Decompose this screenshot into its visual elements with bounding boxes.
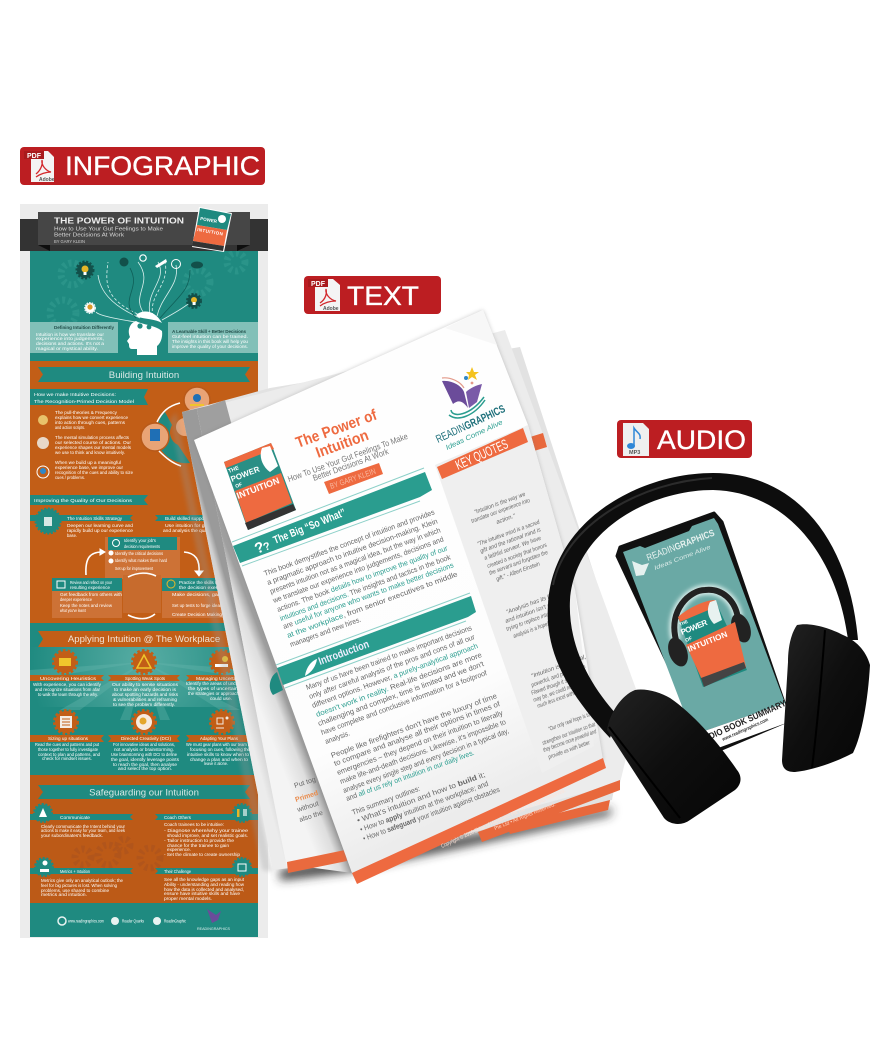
- poster header: Better Decisions At Work: [54, 232, 124, 238]
- text blocks: should improve, and set realistic goals.: [167, 833, 248, 838]
- illustration: headphones: [548, 473, 870, 824]
- text: introduction paragraphs: and all of us rely on intuition in our daily lives.: [345, 748, 475, 803]
- footer band: Copyright © 2016 Shine of Happiness Pte Ltd • All Rights Reserved.: [440, 787, 567, 850]
- text row 1: [33, 676, 253, 707]
- block: tips: The Intuition Skills Strategy: [67, 516, 123, 521]
- panel: acquirable skill: [168, 322, 258, 353]
- text row 1: to make an early decision is: [114, 687, 177, 692]
- text: model steps: our selected course of actions. Our: [55, 440, 131, 445]
- banner: safeguarding: Safeguarding our Intuition: [89, 788, 199, 798]
- quotes: strengthen our intuition so that: [542, 722, 597, 747]
- quotes: created a society that honors: [487, 543, 548, 570]
- box: reflect: Keep the notes and review: [60, 603, 113, 608]
- text blocks: your subordinates's feedback.: [41, 833, 103, 838]
- text: summary paragraph: at the workplace , from senior executives to middle: [286, 570, 459, 640]
- badges row 2: [55, 711, 233, 733]
- mini book cover: POWER: [679, 618, 709, 637]
- quotes: "Our only real hope is to: [548, 712, 591, 733]
- text: introduction paragraphs: analysis.: [324, 729, 351, 746]
- quotes: powerful, and practical too.: [530, 663, 587, 689]
- panel: stacked document: [170, 310, 640, 884]
- panel: defining intuition: magical or mystical ability.: [36, 346, 98, 351]
- back page 2: [197, 330, 640, 873]
- sidebar: key quotes: [435, 425, 598, 773]
- box: practice: Set up tests to forge ideas: [172, 603, 223, 608]
- footer band: [352, 758, 606, 884]
- text blocks: how the data is collected and analysed,: [164, 887, 244, 892]
- quotes: gift." - Albert Einstein: [496, 561, 541, 583]
- column banners: [30, 814, 258, 874]
- page text fragment: also the: [298, 810, 324, 824]
- text blocks: Clearly communicate the Intent behind your: [41, 824, 125, 829]
- text: introduction paragraphs: doesn't work in reality. Real-life decisions are more: [315, 650, 483, 719]
- box: practice: Practice the skills with: [179, 580, 223, 585]
- quotes: Flawed though it sometimes: [531, 671, 587, 697]
- text row 2: context to plan and patterns, and: [38, 752, 100, 757]
- text blocks: Coach trainees to be intuitive:: [164, 822, 224, 827]
- text row 1: the strategies or approaches you: [188, 691, 252, 696]
- box: decision requirements: decision requirements: [124, 544, 161, 549]
- label: audio: AUDIO: [657, 425, 746, 455]
- block: tips: [30, 509, 230, 538]
- box: reflect: resulting experience: [70, 585, 110, 590]
- book cover: THE: [228, 465, 240, 475]
- quotes: may be, we could not survive,: [533, 678, 589, 704]
- quotes: trying to replace intuition with: [506, 605, 568, 633]
- icon: idea gear: [77, 262, 93, 278]
- section: safeguarding: [30, 775, 258, 903]
- box: reflect: Get feedback from others with: [60, 592, 122, 597]
- phone logo: Ideas Come Alive: [654, 544, 713, 572]
- text: summary paragraph: [263, 507, 459, 649]
- quotes: analysis is a hopeless task: [513, 616, 566, 640]
- text: summary paragraph: we translate our experience into judgements, decisions and: [271, 535, 445, 605]
- text row 2: [35, 736, 253, 771]
- label: text: [304, 276, 441, 314]
- text row 2: Sizing up situations: [48, 736, 89, 741]
- banner: improving quality: [30, 495, 148, 505]
- logo: Ideas Come Alive: [445, 419, 504, 452]
- text: model steps: into action through cues, patterns: [55, 420, 126, 425]
- text blocks: Coach Others: [164, 815, 192, 820]
- quotes: they become more powerful and: [543, 729, 598, 754]
- column banners row 2: [30, 735, 258, 742]
- text: model steps: [37, 410, 133, 480]
- quotes: "Intuition is the way we: [474, 492, 527, 516]
- quotes: gift and the rational mind is: [480, 527, 542, 555]
- label: text: TEXT: [347, 281, 419, 311]
- section: applying intuition: [30, 623, 258, 775]
- text: model steps: The pull-theories & Frequency: [55, 410, 118, 415]
- text blocks: Metrics + Intuition: [60, 869, 90, 874]
- label: infographic: INFOGRAPHIC: [65, 151, 260, 181]
- sidebar: key quotes: KEY QUOTES: [453, 436, 510, 473]
- icon: PDF file: [308, 279, 340, 312]
- panel: defining intuition: [30, 322, 118, 353]
- text: summary outline: • How to apply intuition at the workplace; and: [359, 779, 489, 834]
- page text fragment: Primed: [294, 790, 319, 804]
- text: introduction paragraphs: to compare and analyse all their options in times of: [333, 699, 502, 768]
- text: summary paragraph: managers and new hires.: [289, 615, 362, 649]
- background gears: [50, 253, 245, 326]
- book cover: OF: [235, 482, 243, 490]
- text row 2: leave it alone.: [204, 761, 228, 766]
- thought curves: [96, 262, 190, 322]
- banner: big so what: ?: [262, 540, 273, 554]
- back page 3: [182, 347, 632, 870]
- page text fragment: [293, 776, 324, 824]
- text: summary outline: • What's intuition and how to build it;: [356, 770, 486, 825]
- text row 2: those together to fully investigate: [38, 747, 98, 752]
- footer: www.readingraphics.com: [68, 918, 104, 924]
- box: decision requirements: Set up for improvement: [115, 566, 154, 571]
- panel: defining intuition: decisions and actions. It's not a: [36, 341, 104, 346]
- title: Intuition: [314, 427, 371, 462]
- text row 1: Identify the areas of uncertainty,: [186, 681, 252, 686]
- column banners row 1: [30, 675, 258, 681]
- text: summary paragraph: are useful for anyone who wants to make better decisions: [282, 560, 455, 631]
- arrows: cycle: [86, 549, 203, 619]
- text row 2: change a plan and when to: [190, 757, 248, 762]
- badges: [34, 804, 250, 876]
- footer: Reader Quarks: [122, 918, 144, 924]
- box: practice: Make decisions, gain: [172, 592, 223, 597]
- text row 2: not analysis or brainstorming.: [114, 747, 174, 752]
- text row 1: Uncovering Heuristics: [40, 676, 97, 681]
- phone logo: READINGRAPHICS: [645, 528, 716, 564]
- text blocks: - Tailor instruction to provide the: [164, 838, 234, 843]
- text: introduction paragraphs: analyse every single step and every decision in a typical day,: [342, 726, 510, 795]
- badge: coach others: [234, 804, 250, 822]
- book cover: POWER: [229, 465, 261, 484]
- banner: big so what: The Big “So What”: [272, 507, 348, 547]
- text blocks: metrics and intuition.: [41, 892, 87, 897]
- text row 2: Use brainstorming with DCI to define: [111, 752, 177, 757]
- title: How To Use Your Gut Feelings To Make: [286, 431, 409, 484]
- back page 2: Pte Ltd • All Rights Reserved.: [494, 802, 556, 832]
- poster title: THE POWER OF INTUITION: [54, 216, 184, 226]
- headband: [548, 473, 858, 738]
- diagram: improvement cycle: [52, 537, 238, 619]
- text: summary paragraph: intuitions and decisions. The insights and tactics in the book: [279, 552, 452, 623]
- text row 1: could use.: [210, 696, 232, 701]
- block: tips: base.: [67, 533, 77, 538]
- text blocks: actions to make it easy for your team, and seek: [41, 828, 126, 833]
- text blocks: ensure have intuitive skills and have: [164, 891, 240, 896]
- icon: head: [127, 311, 162, 355]
- text: introduction paragraphs: [305, 623, 510, 803]
- text row 1: Spotting Weak Spots: [125, 676, 166, 681]
- badge: spotting: [133, 651, 155, 673]
- title: [286, 406, 409, 494]
- label: infographic: [20, 147, 265, 185]
- mini headphones: [664, 590, 755, 669]
- text blocks: See all the knowledge gaps as an input: [164, 877, 245, 882]
- poster header: [20, 207, 268, 252]
- text: summary paragraph: a pragmatic approach to intuitive decision-making. Klein: [266, 517, 439, 587]
- quotes: and intuition isn't perfect;: [505, 597, 567, 625]
- text blocks: - Set the climate to create ownership: [164, 852, 240, 857]
- title: Better Decisions At Work: [311, 446, 390, 483]
- text: summary paragraph: actions. The book details how to improve the quality of our: [276, 543, 449, 614]
- text: introduction paragraphs: different options. However, a purely-analytical approach: [311, 641, 479, 710]
- banner: improving quality: Improving the Quality of Our Decisions: [34, 498, 133, 503]
- banner: recognition primed model: How we make Intuitive Decisions:: [34, 392, 116, 397]
- logo small: [197, 909, 230, 931]
- text blocks: chance for the trainee to gain: [167, 843, 229, 848]
- icon: PDF file: [24, 151, 55, 183]
- logo: [434, 367, 507, 452]
- sheen: [445, 310, 497, 345]
- quotes: provide us with better: [547, 740, 592, 761]
- text: introduction paragraphs: only after careful analysis of the pros and cons of all our: [308, 632, 477, 701]
- text: summary paragraph: presents intuition not as a magical idea, but the way in which: [269, 526, 442, 596]
- mini book cover: INTUITION: [686, 630, 729, 654]
- text row 1: about spotting hazards and risks: [112, 692, 179, 697]
- book cover: INTUITION: [197, 227, 223, 236]
- right ear cup: [782, 624, 870, 772]
- page text fragment: without: [296, 800, 320, 814]
- phone body: [617, 513, 790, 754]
- key quotes fragment: [530, 433, 547, 451]
- poster header: BY GARY KLEIN: [54, 239, 85, 244]
- box: decision requirements: Identify your job's: [124, 538, 157, 543]
- left ear cup: [607, 689, 741, 824]
- text: model steps: experience shapes our mental models: [55, 445, 132, 450]
- footer: ReadinGraphic: [164, 918, 186, 924]
- icon: PDF file: Adobe: [323, 306, 339, 312]
- text row 1: to walk the team through the why.: [38, 692, 98, 697]
- text: introduction paragraphs: People like firefighters don't have the luxury of time: [330, 691, 498, 760]
- quotes: the servant and forgotten the: [489, 550, 549, 577]
- panel: acquirable skill: improve the quality of your decisions.: [172, 344, 248, 349]
- text: model steps: cues / problems.: [55, 475, 85, 480]
- text row 1: and recognize situations from afar: [35, 687, 100, 692]
- text row 1: Our ability to sense situations: [112, 682, 179, 687]
- block: tips: rapidly build up our experience: [67, 528, 133, 533]
- text blocks: Ability - understanding and reading how: [164, 882, 245, 887]
- footer: [30, 903, 258, 937]
- text row 1: & vulnerabilities and reframing: [113, 697, 177, 702]
- diagram: decision cycle: [141, 387, 210, 466]
- text: summary outline: This summary outlines:: [351, 784, 421, 817]
- text row 2: intuitive skills to know when to: [187, 752, 249, 757]
- book cover: [224, 443, 296, 530]
- text row 1: With experience, you can identify: [33, 682, 102, 687]
- badge: managing: [211, 651, 233, 673]
- banner: building intuition: Building Intuition: [109, 370, 179, 381]
- badge: challenge: [234, 858, 250, 876]
- quotes: [471, 492, 598, 761]
- logo: READINGRAPHICS: [434, 403, 507, 446]
- text blocks: Their Challenge: [164, 869, 191, 874]
- icon: idea gear small: [85, 303, 95, 313]
- text blocks: Metrics give only an analytical outlook; the: [41, 878, 123, 883]
- text: introduction paragraphs: make life-and-death decisions. Likewise, it's impossible to: [339, 717, 507, 786]
- box: practice: Create Decision Making: [172, 612, 222, 617]
- badge: adapting plans: [211, 711, 233, 733]
- text: summary outline: • How to safeguard your intuition against obstacles: [362, 785, 501, 843]
- quotes: action.": [496, 513, 517, 526]
- section: building intuition: [30, 361, 258, 623]
- banner: recognition primed model: [30, 389, 148, 405]
- text blocks: - Diagnose where/why your trainee: [164, 828, 249, 833]
- box: practice: [162, 578, 235, 617]
- icon: PDF file: Adobe: [39, 177, 55, 183]
- white footer: www.readingraphics.com: [721, 717, 770, 743]
- text row 2: Read the cues and patterns and put: [35, 742, 100, 747]
- section: intro teal: [30, 245, 258, 361]
- banner: recognition primed model: The Recognition-Primed Decision Model: [34, 399, 134, 404]
- phone screen: [623, 518, 785, 735]
- text: introduction paragraphs: emergencies – they depend on their intuition to literally: [336, 708, 504, 777]
- sunburst rays: [30, 647, 258, 720]
- box: reflect: Review and reflect on your: [70, 580, 112, 585]
- text blocks: [41, 815, 249, 901]
- text: introduction paragraphs: challenging and complex, time is limited and we don't: [317, 659, 485, 728]
- text row 2: and select the top option.: [118, 766, 172, 771]
- text: introduction paragraphs: have complete and conclusive information for a foolproof: [320, 668, 489, 737]
- book cover: [192, 207, 232, 252]
- quotes: a faithful servant. We have: [484, 536, 543, 562]
- book cover: POWER: [200, 216, 218, 224]
- text blocks: problems, use shared to combine: [41, 888, 109, 893]
- ribbon tails: [20, 219, 268, 251]
- text row 2: focusing on cues, following the: [190, 747, 250, 752]
- poster header: How to Use Your Gut Feelings to Make: [54, 226, 163, 232]
- page text fragment: Put tog: [293, 776, 317, 790]
- text row 2: check for mindset issues.: [42, 756, 92, 761]
- quotes: "Intuition is essential,: [531, 654, 587, 680]
- text: model steps: and action scripts.: [55, 425, 85, 430]
- box: reflect: what you've learnt: [60, 608, 87, 613]
- banner: safeguarding: [38, 785, 250, 799]
- badge: metrics: [36, 858, 52, 876]
- icon: PDF file: PDF: [311, 281, 326, 288]
- icon: idea gear right: [188, 294, 200, 308]
- badge: uncertain: [54, 651, 76, 673]
- quotes: "Analysis has its function: [506, 588, 568, 616]
- box: decision requirements: Identify the critical decisions: [115, 551, 164, 556]
- text row 2: to reach the goal, then analyse: [113, 762, 177, 767]
- title: The Power of: [294, 406, 380, 452]
- block: tips: Deepen our learning curve and: [67, 523, 133, 528]
- quotes: "The intuitive mind is a sacred: [477, 519, 541, 548]
- text row 2: the goal, identify leverage points: [111, 757, 180, 762]
- banner: building intuition: [38, 367, 250, 382]
- mini book cover: OF: [685, 636, 693, 644]
- text row 2: For innovative ideas and solutions,: [113, 742, 175, 747]
- badge: sizing up: [55, 711, 77, 733]
- text: model steps: When we build up a meaningful: [55, 460, 121, 465]
- text row 2: Directed Creativity (DCI): [121, 736, 171, 741]
- background gears: [75, 839, 160, 868]
- badge: communicate: [34, 804, 52, 822]
- icon: PDF file: PDF: [27, 153, 42, 160]
- front page: [194, 310, 606, 884]
- mini book cover: THE: [679, 619, 689, 627]
- white footer: AUDIO BOOK SUMMARY: [697, 698, 788, 746]
- panel: acquirable skill: A Learnable Skill + Better Decisions: [172, 329, 246, 334]
- text: model steps: experience base, we improve our: [55, 465, 123, 470]
- quotes: much less excel without it.": [537, 687, 586, 710]
- text: model steps: recognition of the cues and ability to size: [55, 470, 133, 475]
- box: reflect: deeper experience: [60, 597, 92, 602]
- panel: acquirable skill: The insights in this book will help you: [172, 339, 248, 344]
- block: tips: Use intuition for good: [165, 523, 213, 528]
- badges row 1: [54, 651, 233, 673]
- icons: top row: [120, 255, 203, 268]
- phone logo: [632, 528, 716, 576]
- drop shadows: [170, 412, 612, 880]
- text row 1: Managing Uncertainty: [196, 676, 245, 681]
- quotes: translate our experience into: [471, 498, 531, 525]
- label: audio: [617, 420, 752, 458]
- banner: introduction: [276, 593, 476, 688]
- book cover: INTUITION: [235, 475, 281, 501]
- text row 2: We must gear plans with our team by: [186, 742, 253, 747]
- banner: big so what: ?: [252, 539, 267, 558]
- poster frame: [20, 204, 268, 938]
- panel: defining intuition: Intuition is how we translate our: [36, 332, 104, 337]
- text: model steps: we use to think and know intuitively.: [55, 450, 125, 455]
- mini book cover: [678, 600, 747, 687]
- panel: infographic poster: [20, 204, 268, 938]
- icon: MP3 file: MP3: [629, 450, 640, 456]
- text: summary paragraph: This book demystifies the concept of intuition and provides: [263, 507, 436, 578]
- banner: applying: [38, 631, 250, 647]
- box: reflect: [52, 578, 122, 613]
- text: model steps: explains how we convert experience: [55, 415, 128, 420]
- banner: applying: Applying Intuition @ The Workplace: [68, 634, 220, 645]
- badge: directed creativity: [133, 711, 155, 733]
- author tag: BY GARY KLEIN: [329, 467, 377, 491]
- panel: defining intuition: Defining Intuition Differently: [54, 325, 114, 330]
- box: decision requirements: [108, 537, 177, 571]
- text: introduction paragraphs: Many of us have been trained to make important decisions: [305, 623, 473, 692]
- text row 1: the types of uncertainty and: [188, 686, 253, 691]
- box: practice: the decision exercises: [179, 585, 230, 590]
- text blocks: experience.: [167, 847, 191, 852]
- panel: defining intuition: experience into judgements,: [36, 336, 104, 341]
- text blocks: feel for big pictures is lost. When solving: [41, 883, 117, 888]
- block: tips: and analysis the quality: [163, 528, 214, 533]
- banner: introduction: Introduction: [317, 638, 371, 668]
- illustration: phone: [617, 513, 790, 754]
- box: decision requirements: Identify what makes them hard: [115, 558, 167, 563]
- text blocks: Communicate: [60, 815, 90, 820]
- text blocks: proper mental models.: [164, 896, 212, 901]
- text row 1: to see the problem differently.: [113, 702, 175, 707]
- text: model steps: The mental simulation process affects: [55, 435, 130, 440]
- logo small: READINGRAPHICS: [197, 926, 230, 931]
- panel: acquirable skill: Gut-feel intuition can be trained.: [172, 334, 248, 339]
- text row 2: Adapting Your Plans: [200, 736, 239, 741]
- banner: big so what: [232, 468, 432, 566]
- block: tips: Build skilled support: [165, 516, 208, 521]
